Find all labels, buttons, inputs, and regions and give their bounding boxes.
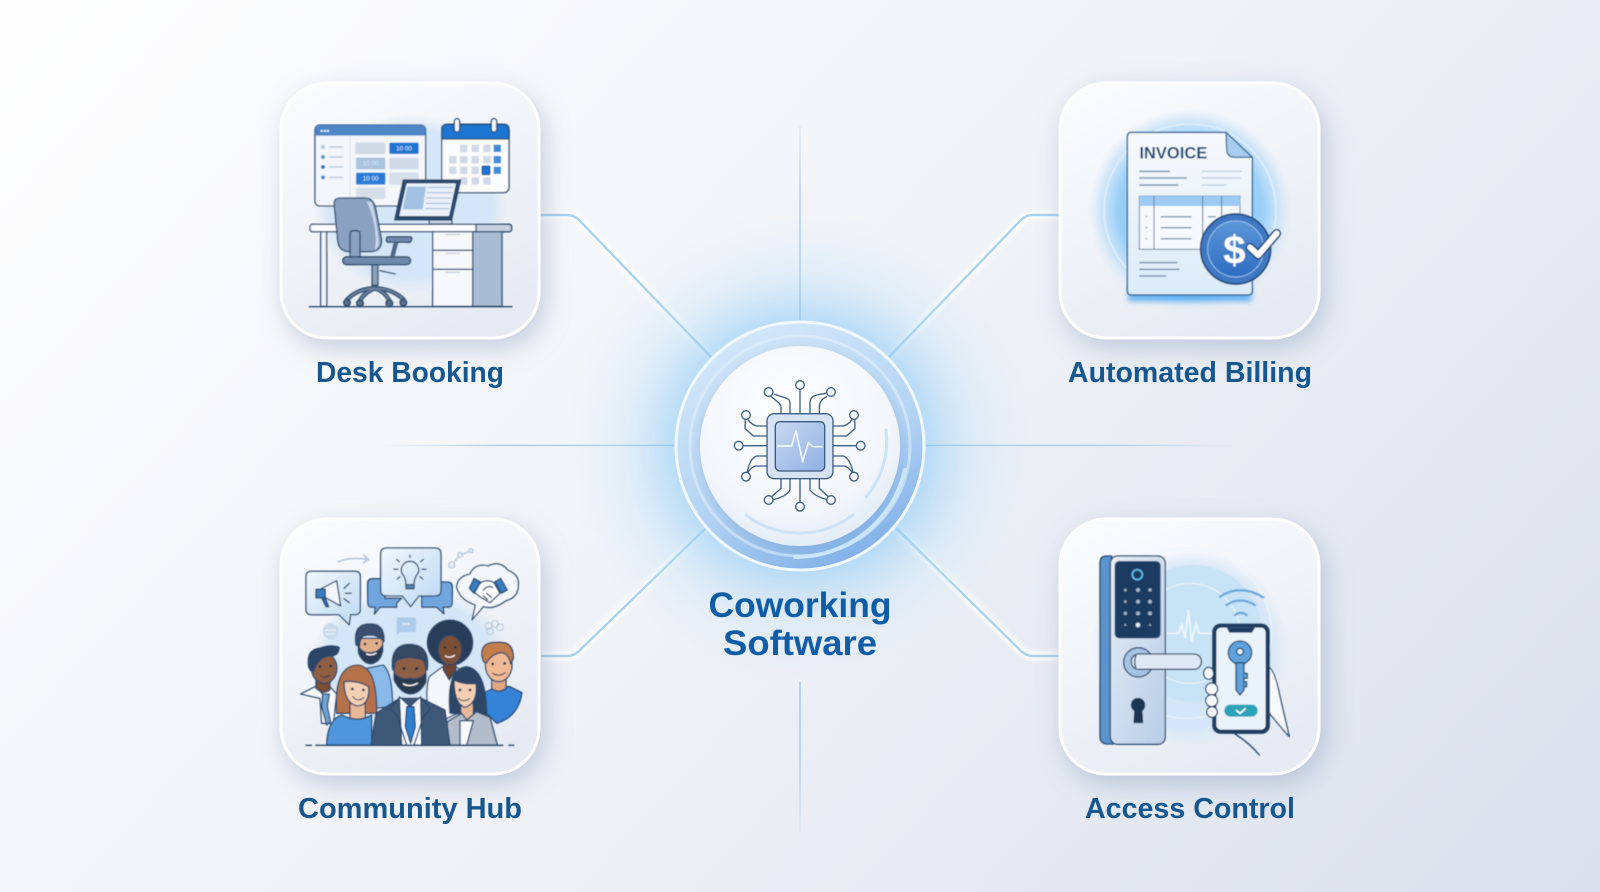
panel: automated billing xyxy=(1060,83,1319,389)
icon: desk with booking screen, calendar and chair: 10 00 xyxy=(363,161,379,168)
person: woman dark hair xyxy=(447,667,497,745)
icon: invoice with paid coin: INVOICE xyxy=(1139,144,1207,163)
outer ring xyxy=(676,322,924,570)
icon: desk with booking screen, calendar and chair xyxy=(309,113,512,307)
person: central man in suit xyxy=(371,644,450,745)
icon: smart lock and phone key xyxy=(1092,548,1289,755)
icon: team with speech bubbles: ••• xyxy=(402,620,410,629)
person: bearded man back xyxy=(355,624,393,708)
panel: desk booking xyxy=(281,83,539,389)
icon: team with speech bubbles xyxy=(301,548,522,745)
card xyxy=(1060,519,1319,774)
person: woman with afro xyxy=(427,620,473,720)
icon: invoice with paid coin: $ xyxy=(1223,229,1245,273)
label: Community Hub xyxy=(298,793,522,825)
icon: circuit chip with pulse xyxy=(734,381,865,511)
panel: access control xyxy=(1060,519,1319,825)
person: man with tie left xyxy=(301,646,339,725)
card xyxy=(1060,83,1319,338)
label: Automated Billing xyxy=(1068,357,1312,389)
title: Coworking xyxy=(708,586,892,625)
card xyxy=(281,519,539,774)
icon: desk with booking screen, calendar and chair: 10 00 xyxy=(363,176,379,183)
center hub xyxy=(565,211,1035,681)
card xyxy=(281,83,539,338)
label: Access Control xyxy=(1085,793,1295,825)
icon: desk with booking screen, calendar and chair: ●●● xyxy=(320,129,330,135)
person: man right xyxy=(482,642,522,723)
icon: desk with booking screen, calendar and chair: 10 00 xyxy=(396,146,412,153)
glow xyxy=(565,211,1035,681)
person: woman red hair xyxy=(327,665,377,745)
subtitle: Software xyxy=(723,624,877,663)
icon: invoice with paid coin xyxy=(1088,108,1292,312)
connector lines xyxy=(385,126,1235,832)
panel: community hub xyxy=(281,519,539,825)
label: Desk Booking xyxy=(316,357,504,389)
inner disc xyxy=(700,346,900,546)
